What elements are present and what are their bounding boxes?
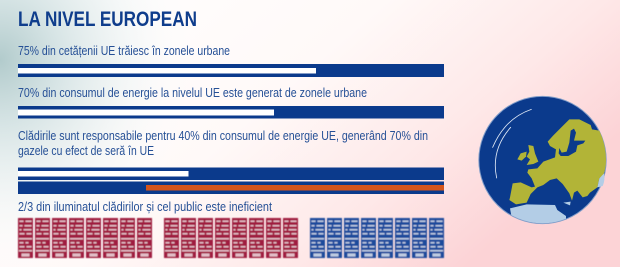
North Africa <box>510 204 566 224</box>
bar: 70 percent emissions <box>18 182 444 194</box>
stat text: inefficient lighting: 2/3 din iluminatul clădirilor și cel public este ineficient <box>18 200 272 214</box>
Great Britain <box>527 145 538 165</box>
icon: globe showing Europe <box>479 96 606 227</box>
building icons: first red group <box>18 218 152 258</box>
stat text: urban citizens: 75% din cetățenii UE trăiesc în zonele urbane <box>18 44 230 58</box>
building icons: blue group <box>310 218 444 258</box>
Baltic Sea <box>559 129 585 156</box>
Sicily <box>563 202 571 205</box>
stat: urban energy <box>18 86 444 118</box>
mainland Europe <box>509 119 606 204</box>
building icons: second red group <box>164 218 298 258</box>
stat: inefficient lighting <box>18 200 444 258</box>
globe highlights <box>493 109 531 178</box>
Ireland <box>517 152 527 161</box>
stat text: buildings: gazele cu efect de seră în UE <box>18 144 154 158</box>
stat text: buildings: Clădirile sunt responsabile pentru 40% din consumul de energie UE, generând 70% din <box>18 129 428 143</box>
stat: buildings <box>18 129 444 194</box>
stat: urban citizens <box>18 44 444 77</box>
bar: 75 percent <box>18 64 444 77</box>
bar: 40 percent energy <box>18 168 444 180</box>
globe disc <box>479 96 606 224</box>
Black Sea <box>597 173 604 187</box>
bar: 70 percent <box>18 106 444 118</box>
stat text: urban energy: 70% din consumul de energie la nivelul UE este generat de zonele urbane <box>18 86 367 100</box>
title: LA NIVEL EUROPEAN <box>18 8 197 31</box>
